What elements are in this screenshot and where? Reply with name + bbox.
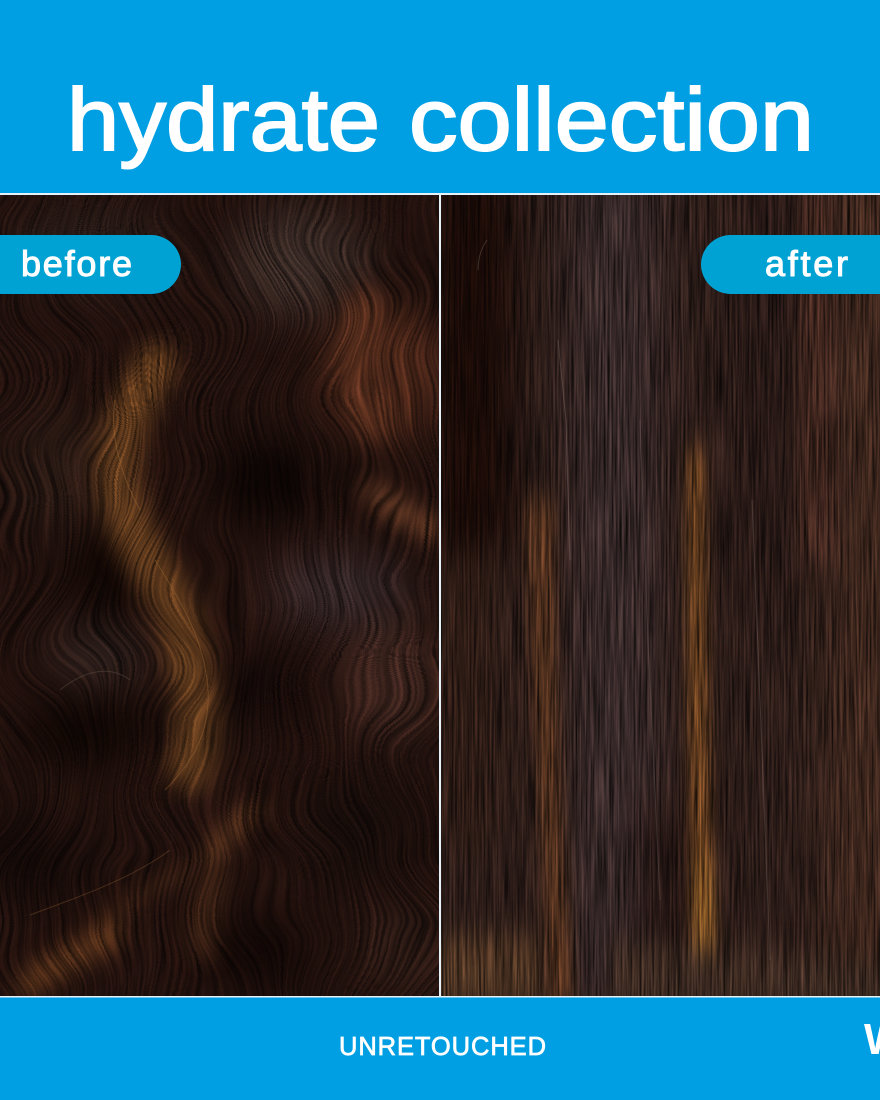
label: after [701,235,880,294]
label: before [0,235,181,294]
caption: unretouched: UNRETOUCHED [339,1033,546,1061]
hair texture: straight strands [441,195,880,996]
hair texture: wavy strands [0,195,439,996]
title: hydrate [67,70,380,169]
photo: before, wavy hair [0,195,439,996]
fine strands [478,240,770,960]
label: after: after [765,243,848,284]
title: collection [409,70,814,169]
fine strands [30,400,208,915]
divider lines [0,193,880,998]
photo: after, straight hair [425,170,880,1010]
label: before: before [21,243,132,284]
title [67,70,814,169]
